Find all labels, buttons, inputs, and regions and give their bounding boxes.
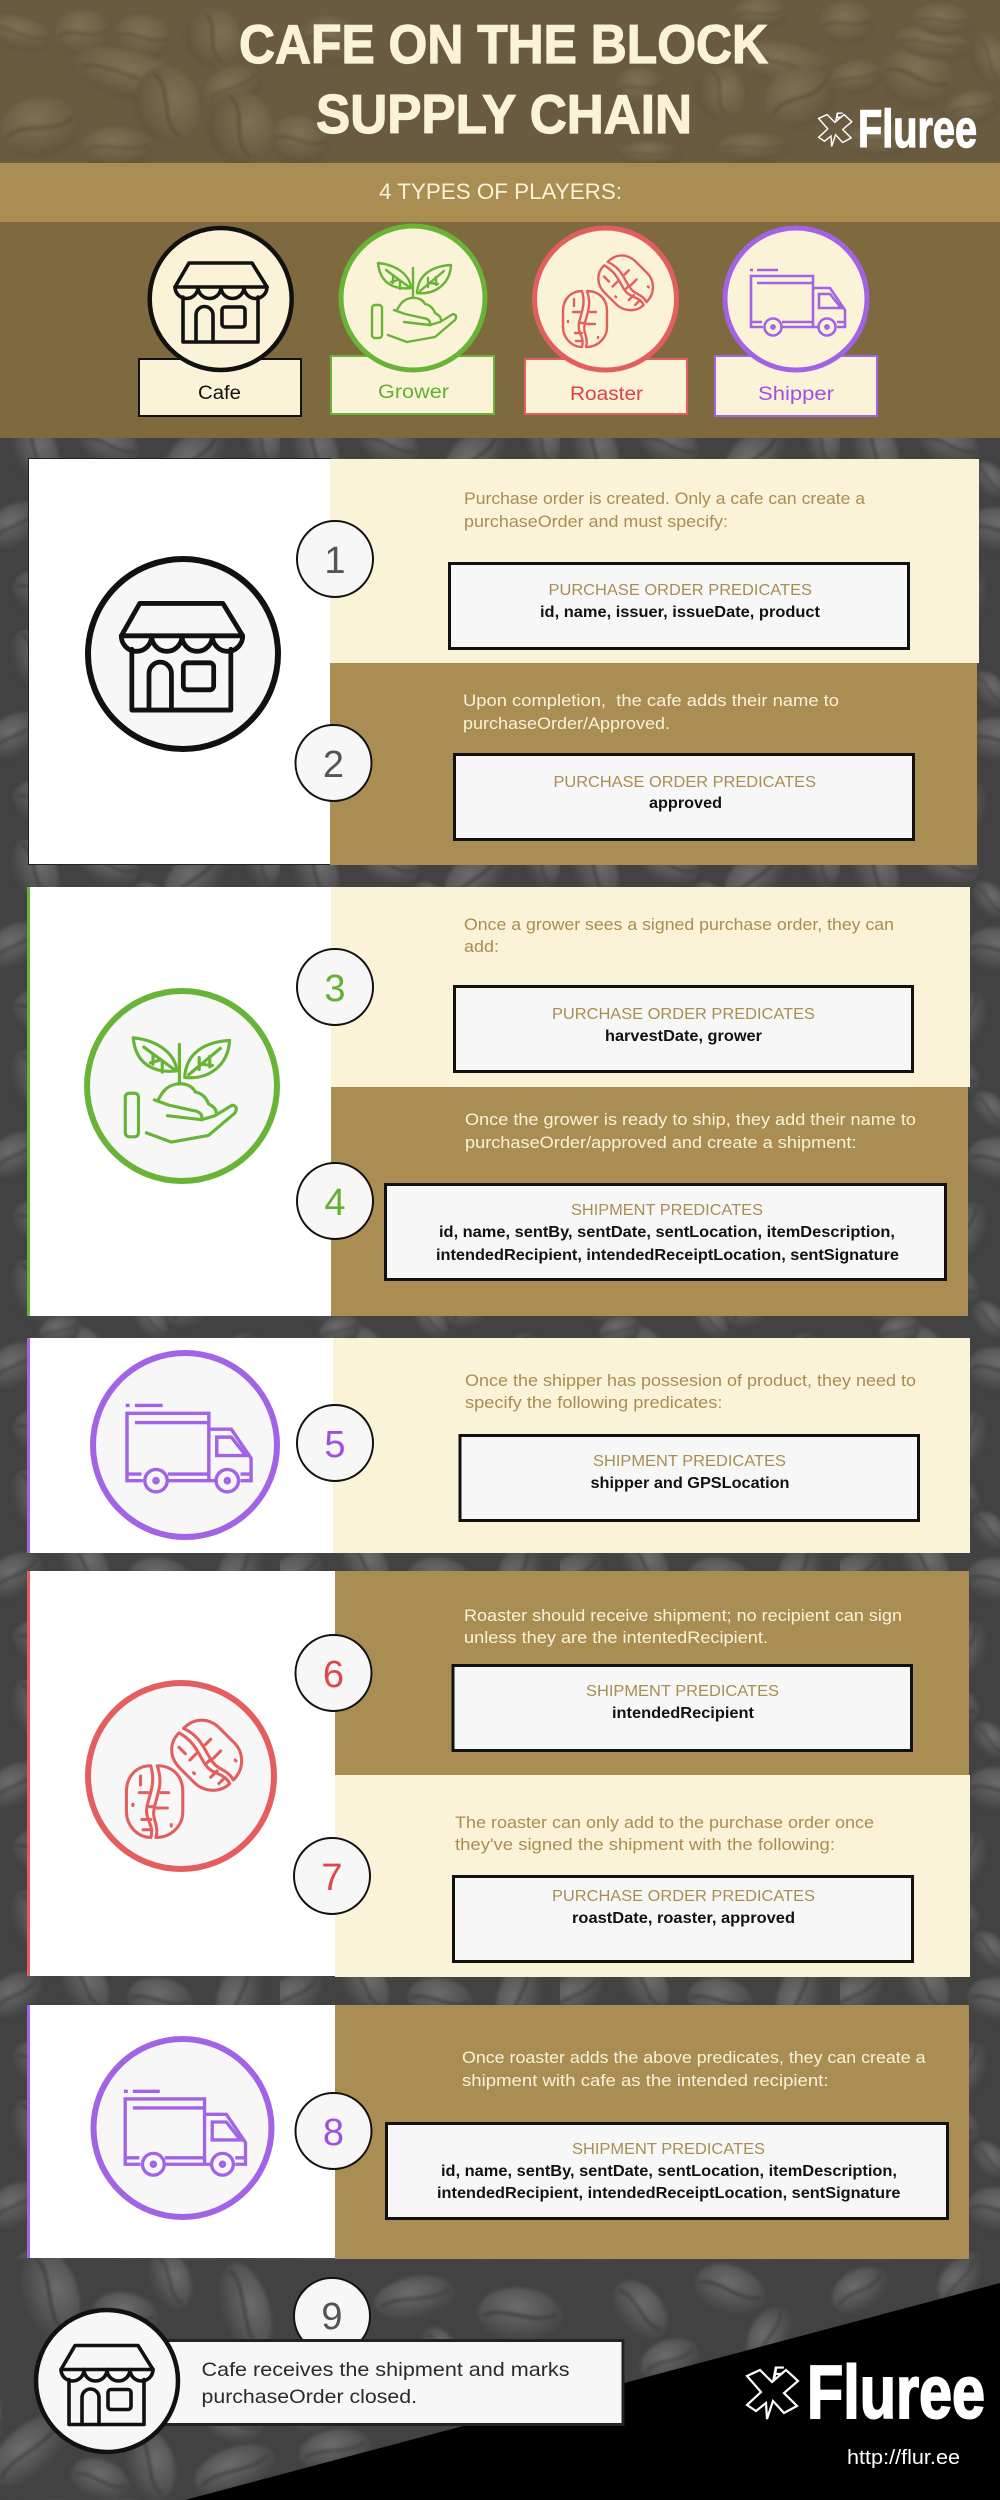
step 9 number: 9 (321, 2296, 343, 2338)
step 5 text (465, 1372, 916, 1412)
header with coffee bean photo (0, 0, 1000, 163)
step 8 text (462, 2049, 926, 2090)
step 2 number: 2 (323, 744, 344, 786)
step 1 text: purchaseOrder and must specify: (464, 513, 728, 531)
step 8 predicates box: id, name, sentBy, sentDate, sentLocation, itemDescription, (441, 2163, 897, 2180)
band: 4 types of players: 4 TYPES OF PLAYERS: (379, 179, 622, 204)
step 4 predicates box: id, name, sentBy, sentDate, sentLocation, itemDescription, (439, 1224, 895, 1241)
step 5 number: 5 (324, 1424, 346, 1466)
step 7 predicates box (454, 1876, 912, 1962)
step 2 predicates box: approved (649, 795, 722, 812)
step 8 text: shipment with cafe as the intended recipient: (462, 2072, 828, 2090)
step 4 text: Once the grower is ready to ship, they add their name to (465, 1111, 916, 1129)
step 9 number (294, 2278, 370, 2354)
step 8 number (296, 2093, 372, 2169)
step 3 predicates box (454, 986, 912, 1072)
step 5 predicates box (460, 1436, 918, 1520)
callout: step 9 text box: purchaseOrder closed. (202, 2386, 417, 2408)
icon: grower plant (87, 991, 277, 1181)
step 8 number: 8 (323, 2112, 344, 2154)
step 7 text: they've signed the shipment with the following: (455, 1836, 835, 1854)
title: CAFE ON THE BLOCK (239, 13, 768, 75)
panel: players (0, 222, 1000, 438)
step 3 text: Once a grower sees a signed purchase order, they can (464, 916, 894, 934)
icon: cafe store (88, 559, 278, 749)
player: roaster: Roaster (570, 384, 644, 405)
step 4 predicates box: SHIPMENT PREDICATES (571, 1202, 763, 1219)
player: roaster (525, 228, 687, 414)
step 6 predicates box: intendedRecipient (612, 1705, 754, 1722)
player: cafe: Cafe (198, 383, 241, 404)
icon: delivery truck (94, 2039, 272, 2217)
panel: cafe steps 1 and 2 (28, 458, 979, 865)
step 2 text (463, 692, 839, 733)
step 4 predicates box: intendedRecipient, intendedReceiptLocation, sentSignature (436, 1247, 899, 1264)
step 2 text: Upon completion, the cafe adds their name to (463, 692, 839, 710)
player: cafe (139, 228, 301, 416)
step 6 number (296, 1635, 372, 1711)
player: shipper: Shipper (758, 384, 835, 405)
callout: step 9 text box (160, 2340, 623, 2424)
callout: step 9 text box: Cafe receives the shipment and marks (202, 2359, 570, 2381)
step 6 number: 6 (323, 1654, 344, 1696)
step 6 predicates box: SHIPMENT PREDICATES (586, 1683, 779, 1700)
step 3 text: add: (464, 938, 499, 956)
step 4 number: 4 (324, 1182, 346, 1224)
foreground beans at the bottom of the page (0, 2244, 1000, 2500)
step 7 number (294, 1838, 370, 1914)
panel: roaster steps 6 and 7 (27, 1571, 970, 1977)
step 3 predicates box: PURCHASE ORDER PREDICATES (552, 1006, 815, 1023)
panel: shipper step 5 (27, 1338, 970, 1553)
player: grower (331, 226, 494, 414)
title (239, 13, 768, 145)
step 5 predicates box: shipper and GPSLocation (590, 1475, 790, 1492)
player: grower: Grower (378, 382, 450, 403)
step 1 text: Purchase order is created. Only a cafe can create a (464, 490, 866, 508)
step 7 text: The roaster can only add to the purchase order once (455, 1814, 874, 1832)
black footer triangle (185, 2283, 1000, 2500)
step 5 number (297, 1405, 373, 1481)
band: 4 types of players (0, 163, 1000, 222)
panel: roaster shipment step 8 (27, 2005, 969, 2259)
step 5 predicates box: SHIPMENT PREDICATES (593, 1453, 786, 1470)
step 7 text (455, 1814, 874, 1854)
step 6 text: Roaster should receive shipment; no recipient can sign (464, 1607, 902, 1625)
footer url: http://flur.ee (847, 2447, 960, 2469)
step 1 number: 1 (324, 540, 346, 582)
step 7 number: 7 (321, 1857, 343, 1899)
step 3 number (297, 949, 373, 1025)
step 3 text (464, 916, 894, 956)
step 8 predicates box: SHIPMENT PREDICATES (572, 2141, 765, 2158)
icon: cafe store closing (36, 2310, 178, 2452)
step 4 text (465, 1111, 916, 1152)
step 2 number (296, 725, 372, 801)
step 6 text: unless they are the intentedRecipient. (464, 1629, 768, 1647)
step 6 predicates box (453, 1666, 912, 1750)
icon: shipper truck (93, 1353, 277, 1537)
step 1 predicates box: id, name, issuer, issueDate, product (540, 604, 820, 621)
player: shipper (715, 228, 877, 416)
step 6 text (464, 1607, 902, 1647)
step 3 number: 3 (324, 968, 346, 1010)
step 5 text: Once the shipper has possesion of product, they need to (465, 1372, 916, 1390)
step 2 predicates box: PURCHASE ORDER PREDICATES (554, 774, 816, 791)
step 7 predicates box: PURCHASE ORDER PREDICATES (552, 1888, 815, 1905)
step 1 predicates box: PURCHASE ORDER PREDICATES (548, 582, 812, 599)
step 5 text: specify the following predicates: (465, 1394, 722, 1412)
step 8 predicates box: intendedRecipient, intendedReceiptLocation, sentSignature (437, 2185, 901, 2202)
step 4 text: purchaseOrder/approved and create a shipment: (465, 1134, 856, 1152)
step 7 predicates box: roastDate, roaster, approved (572, 1910, 795, 1927)
title: SUPPLY CHAIN (316, 83, 692, 145)
step 1 text (464, 490, 866, 531)
step 4 number (297, 1163, 373, 1239)
logo: Fluree header (819, 100, 977, 159)
step 8 predicates box (386, 2124, 948, 2218)
step 1 predicates box (450, 564, 908, 648)
step 4 predicates box (386, 1184, 946, 1280)
step 3 predicates box: harvestDate, grower (605, 1028, 762, 1045)
step 8 text: Once roaster adds the above predicates, they can create a (462, 2049, 926, 2067)
icon: roaster beans (88, 1683, 274, 1869)
step 1 number (297, 521, 373, 597)
panel: grower steps 3 and 4 (27, 887, 970, 1316)
step 2 text: purchaseOrder/Approved. (463, 715, 670, 733)
step 2 predicates box (454, 754, 914, 840)
